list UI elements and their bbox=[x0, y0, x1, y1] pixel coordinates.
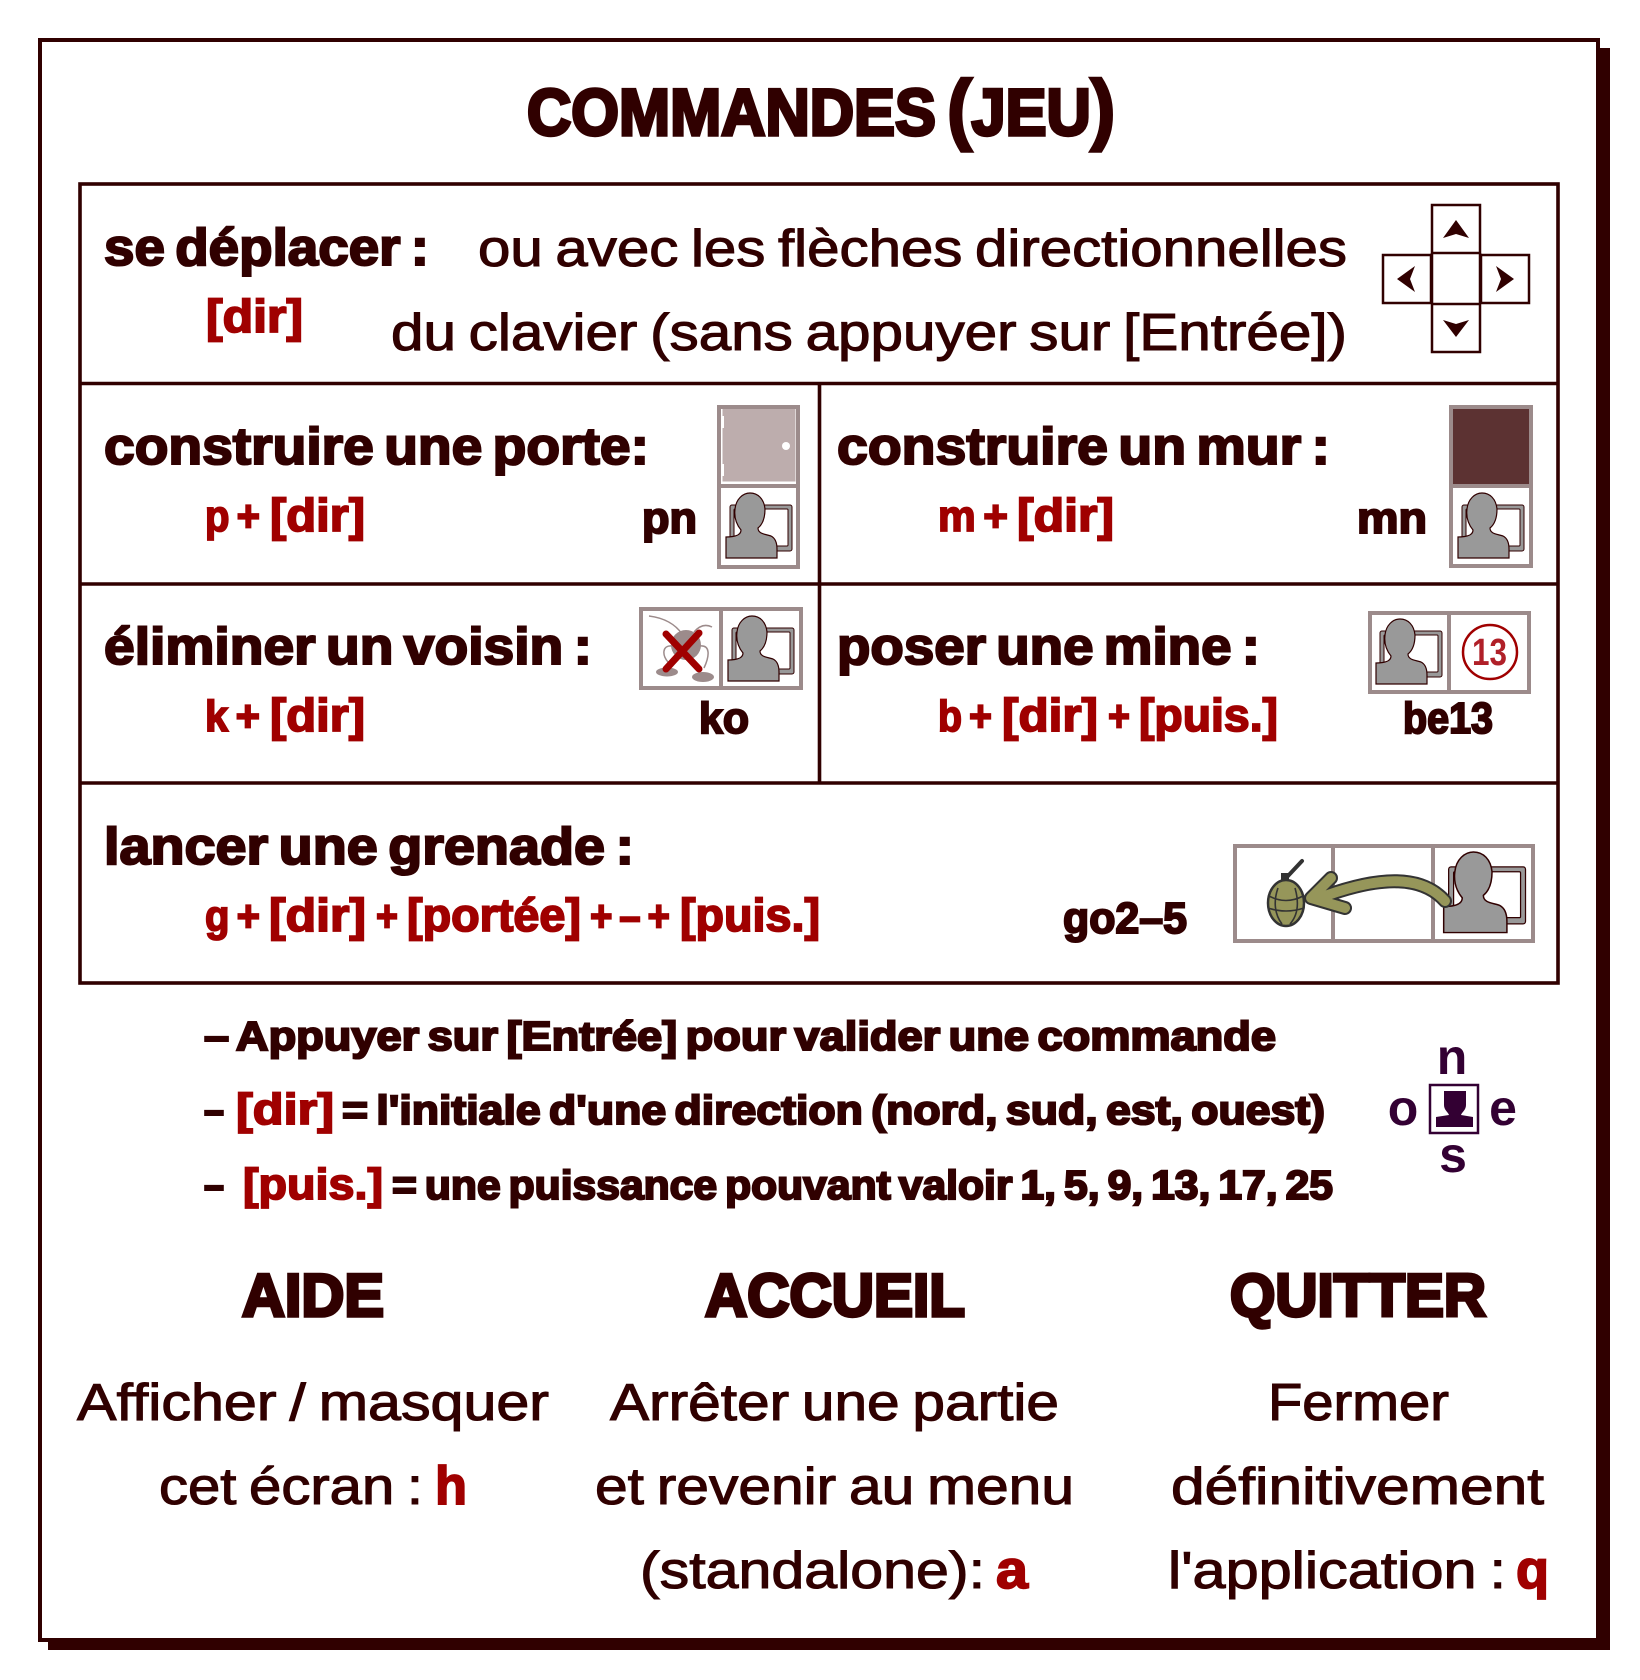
panel: éliminer un voisin: éliminer un voisin : bbox=[104, 618, 592, 676]
notes: = une puissance pouvant valoir 1, 5, 9, 13, 17, 25 bbox=[392, 1162, 1333, 1208]
panel: construire une porte: pn bbox=[642, 494, 697, 543]
panel: se déplacer: [dir] bbox=[206, 290, 303, 342]
title: COMMANDES (JEU) bbox=[527, 64, 1115, 152]
panel: lancer une grenade: [puis.] bbox=[680, 889, 820, 941]
panel: se déplacer bbox=[104, 205, 1529, 362]
panel: lancer une grenade: [dir] bbox=[269, 889, 366, 941]
panel: poser une mine: be13 bbox=[1403, 694, 1493, 743]
panel: lancer une grenade: + – + bbox=[590, 892, 670, 941]
icon: wall and player bbox=[1449, 407, 1532, 566]
panel: poser une mine: poser une mine : bbox=[837, 618, 1260, 676]
section: accueil: et revenir au menu bbox=[595, 1458, 1074, 1516]
panel: se déplacer: se déplacer : bbox=[104, 219, 429, 277]
panel: construire un mur: m + bbox=[938, 492, 1008, 541]
panel: poser une mine bbox=[837, 611, 1529, 743]
icon: door and player bbox=[717, 407, 800, 567]
section: aide: cet écran : bbox=[159, 1458, 423, 1516]
icon: grenade throw bbox=[1235, 844, 1533, 943]
section: quitter: définitivement bbox=[1171, 1458, 1545, 1516]
section: aide: h bbox=[435, 1456, 467, 1516]
panel: construire une porte: p + bbox=[205, 492, 260, 541]
panel: construire un mur: construire un mur : bbox=[837, 418, 1330, 476]
icon: eliminated neighbour and player bbox=[641, 607, 801, 690]
notes: [dir] bbox=[236, 1085, 334, 1134]
section: accueil: (standalone): bbox=[640, 1542, 985, 1600]
section: aide: Afficher / masquer bbox=[77, 1374, 549, 1432]
section: accueil: Arrêter une partie bbox=[610, 1374, 1059, 1432]
panel: poser une mine: [puis.] bbox=[1139, 689, 1278, 741]
panel: construire un mur: [dir] bbox=[1017, 489, 1114, 541]
icon: player and mine bbox=[1370, 611, 1529, 694]
section: aide bbox=[77, 1262, 549, 1516]
icon: arrow keys bbox=[1383, 205, 1529, 352]
panel: se déplacer: ou avec les flèches directionnelles bbox=[478, 220, 1347, 278]
section: accueil: ACCUEIL bbox=[705, 1262, 965, 1329]
panel: construire une porte: construire une porte: bbox=[104, 418, 649, 476]
icon: compass directions: s bbox=[1439, 1127, 1467, 1183]
notes: [puis.] bbox=[243, 1160, 383, 1209]
panel: lancer une grenade: go2–5 bbox=[1063, 894, 1187, 943]
panel: lancer une grenade: + bbox=[376, 892, 398, 941]
icon: compass directions: o bbox=[1388, 1080, 1418, 1136]
notes: – Appuyer sur [Entrée] pour valider une commande bbox=[204, 1013, 1276, 1059]
section: quitter: Fermer bbox=[1268, 1374, 1449, 1432]
panel: poser une mine: b + bbox=[938, 692, 992, 741]
panel: lancer une grenade: lancer une grenade : bbox=[104, 818, 634, 876]
section: quitter bbox=[1168, 1262, 1549, 1600]
panel: lancer une grenade: g + bbox=[205, 892, 260, 941]
panel: construire un mur: mn bbox=[1357, 494, 1427, 543]
notes bbox=[204, 1013, 1333, 1209]
section: quitter: QUITTER bbox=[1230, 1262, 1486, 1329]
panel: éliminer un voisin bbox=[104, 607, 801, 743]
panel: éliminer un voisin: [dir] bbox=[270, 689, 365, 741]
panel: poser une mine: [dir] bbox=[1002, 689, 1098, 741]
panel: construire une porte bbox=[104, 407, 800, 567]
section: accueil bbox=[595, 1262, 1074, 1600]
panel: lancer une grenade: [portée] bbox=[407, 889, 581, 941]
notes: = l'initiale d'une direction (nord, sud, est, ouest) bbox=[342, 1087, 1325, 1133]
section: quitter: q bbox=[1516, 1540, 1549, 1600]
section: aide: AIDE bbox=[242, 1262, 384, 1329]
icon: compass directions: n bbox=[1437, 1029, 1467, 1085]
panel: éliminer un voisin: ko bbox=[699, 694, 749, 743]
section: quitter: l'application : bbox=[1168, 1542, 1506, 1600]
panel: construire une porte: [dir] bbox=[270, 489, 365, 541]
icon: player and mine: 13 bbox=[1472, 632, 1507, 674]
notes: – bbox=[204, 1162, 224, 1208]
section: accueil: a bbox=[996, 1540, 1029, 1600]
icon: compass directions: e bbox=[1489, 1080, 1517, 1136]
panel: éliminer un voisin: k + bbox=[205, 692, 260, 741]
panel: construire un mur bbox=[837, 407, 1532, 566]
panel: se déplacer: du clavier (sans appuyer sur [Entrée]) bbox=[391, 304, 1347, 362]
panel: lancer une grenade bbox=[104, 818, 1533, 943]
panel: poser une mine: + bbox=[1108, 692, 1130, 741]
notes: – bbox=[204, 1087, 224, 1133]
icon: compass directions bbox=[1388, 1029, 1517, 1183]
commands table grid bbox=[80, 184, 1558, 983]
